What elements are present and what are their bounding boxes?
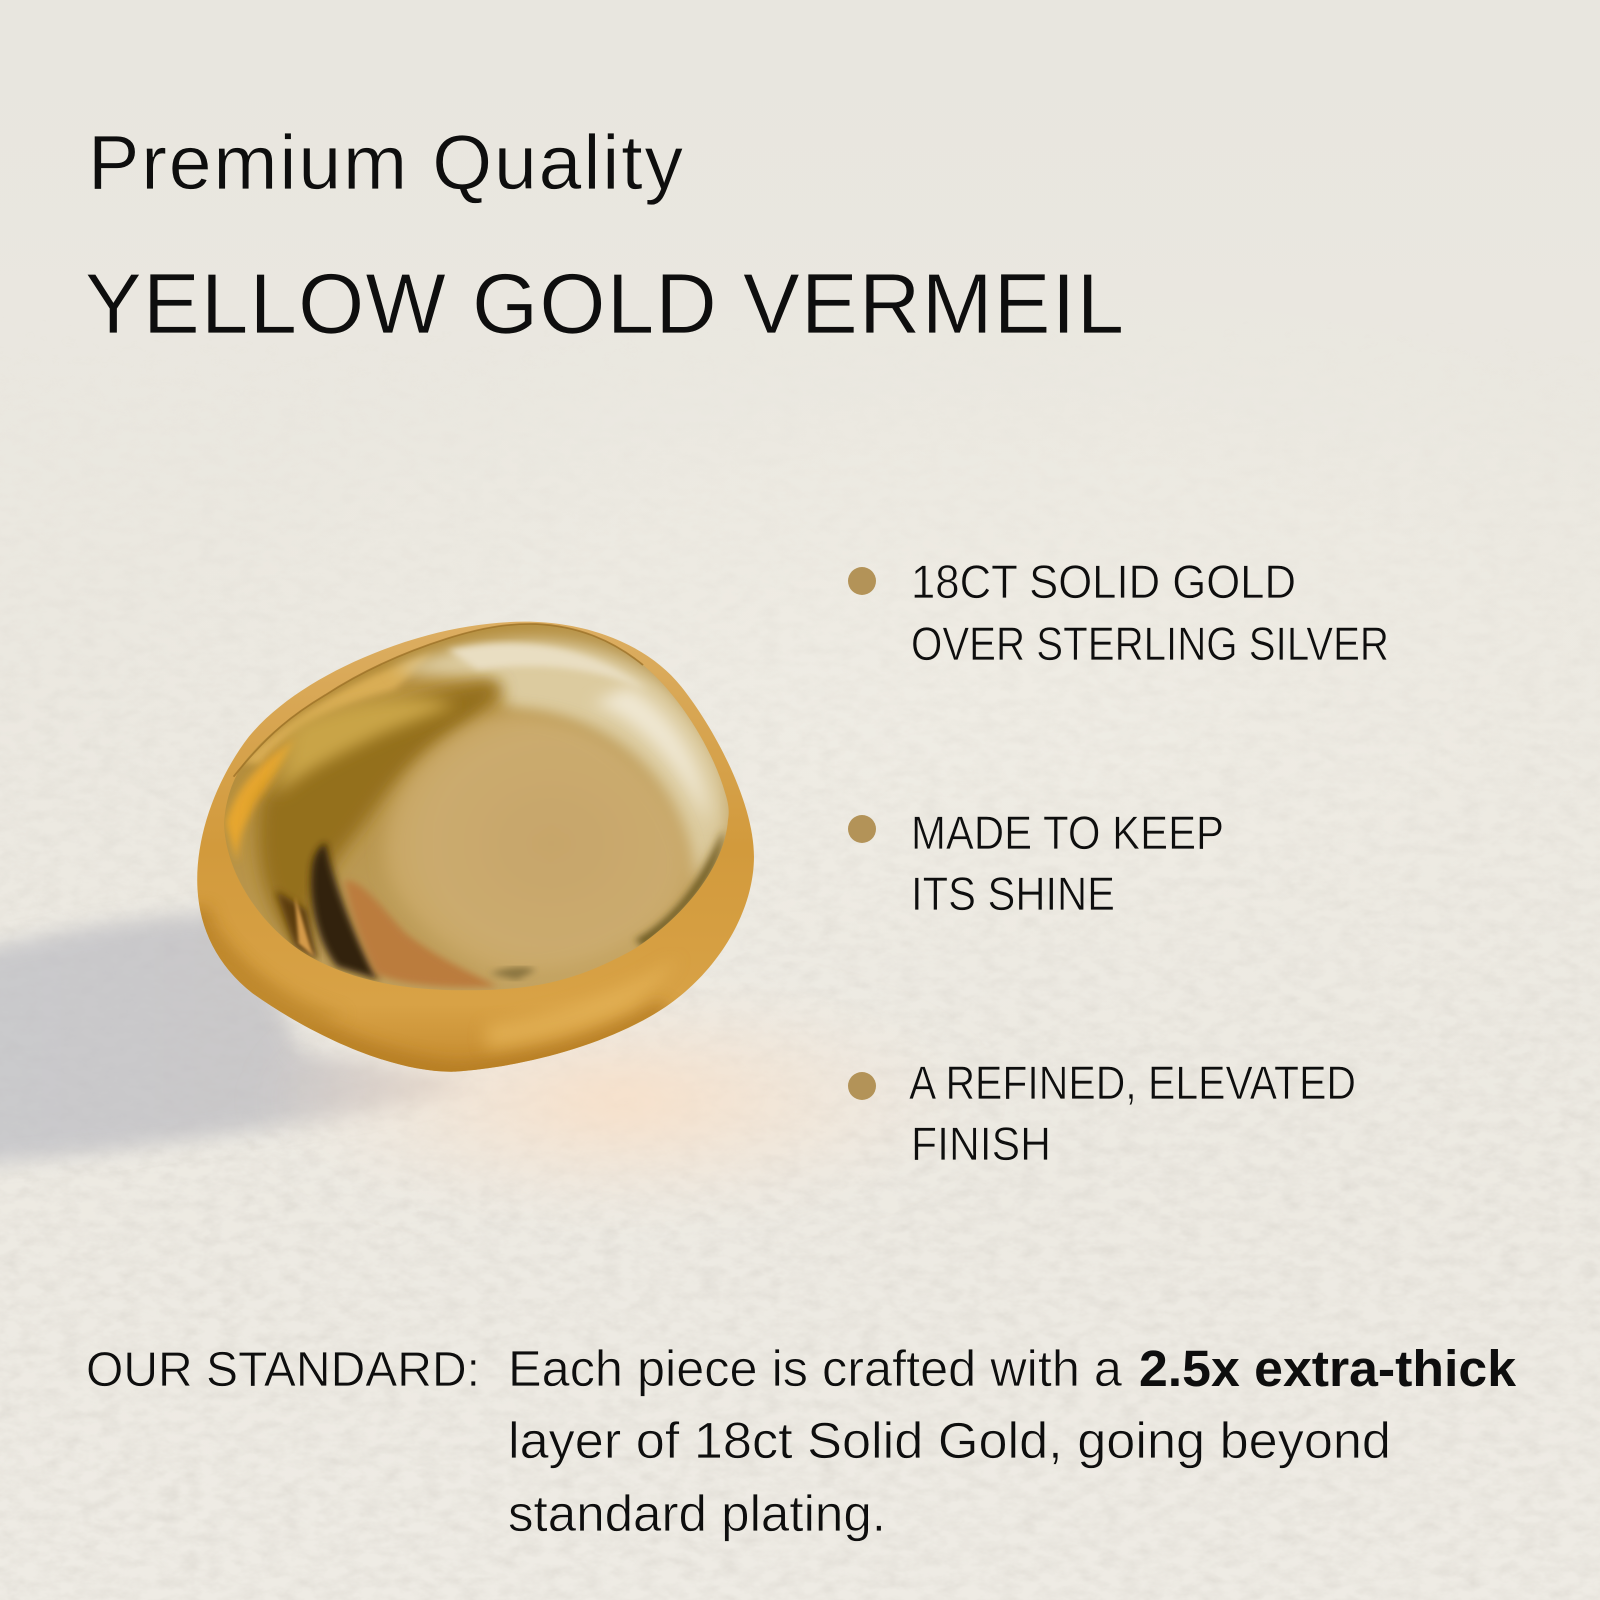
statement body: 2.5x extra-thick (1139, 1340, 1517, 1397)
bullet 3 (848, 1056, 1356, 1170)
bullet 2: ITS SHINE (911, 867, 1115, 920)
background: textured paper (8, 1066, 1596, 1584)
bullet dot (848, 567, 876, 595)
gold vermeil piece (197, 620, 754, 1072)
our standard statement (86, 1340, 1517, 1542)
cast shadow of gold piece (0, 912, 480, 1168)
bullet 3: FINISH (911, 1117, 1051, 1170)
warm reflected glow under gold piece (260, 980, 980, 1220)
bullet dot (848, 815, 876, 843)
gold body (197, 622, 754, 1072)
rim highlight (234, 624, 643, 777)
bullet dot (848, 1072, 876, 1100)
statement body: layer of 18ct Solid Gold, going beyond (508, 1412, 1391, 1469)
bullet 1 (848, 555, 1389, 670)
bullet 2 (848, 806, 1224, 920)
pale central disc (384, 713, 688, 974)
statement body: Each piece is crafted with a (508, 1340, 1123, 1397)
bullet 1: 18CT SOLID GOLD (911, 555, 1296, 608)
bowl reflection (211, 620, 746, 997)
body edge shading (197, 907, 677, 1072)
title: Yellow Gold Vermeil: YELLOW GOLD VERMEIL (85, 257, 1124, 352)
statement body: standard plating. (508, 1485, 886, 1542)
subtitle: Premium Quality: Premium Quality (88, 120, 684, 206)
label: our standard: OUR STANDARD: (86, 1343, 480, 1397)
statement body (508, 1340, 1517, 1542)
bullet 3: A REFINED, ELEVATED (909, 1056, 1356, 1109)
bullet 2: MADE TO KEEP (911, 806, 1224, 859)
bullet 1: OVER STERLING SILVER (911, 617, 1389, 670)
